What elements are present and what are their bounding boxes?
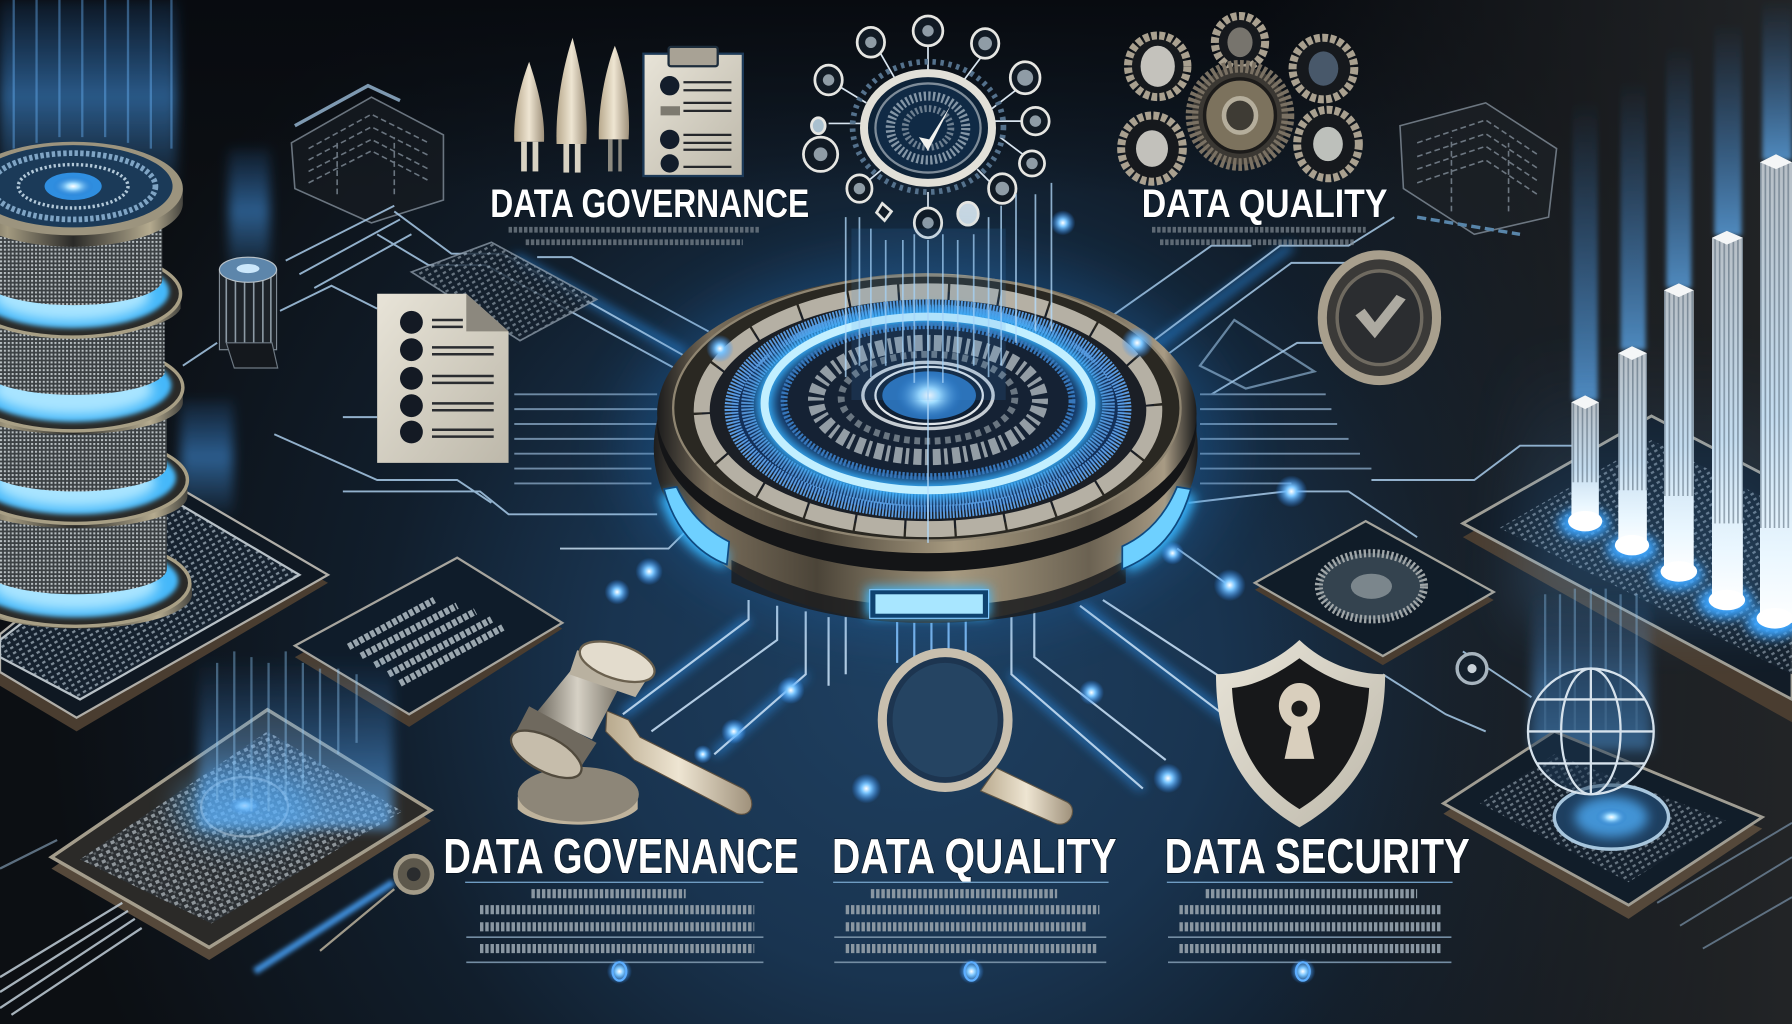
icon: clipboard — [643, 47, 743, 176]
blue tick ring — [731, 306, 1125, 512]
small canister — [219, 257, 278, 368]
globe beam — [1533, 589, 1650, 750]
hub dial — [853, 62, 1003, 192]
bar chart beams — [1573, 0, 1792, 400]
light beams top left — [0, 0, 177, 194]
left light — [664, 487, 729, 565]
bar 2 — [1607, 346, 1657, 563]
icon: shield lock — [1216, 640, 1385, 827]
icon: gavel — [504, 633, 752, 825]
plate 3 — [0, 320, 183, 434]
heading: data security bottom: DATA SECURITY — [1165, 830, 1470, 884]
right panel medallion — [1255, 521, 1494, 665]
garbled caption: data quality — [833, 882, 1109, 962]
upper right panel strokes — [1200, 320, 1314, 389]
faint machinery sketch left — [291, 86, 443, 223]
left small panel — [295, 558, 562, 727]
icon: security node — [1290, 959, 1315, 984]
silver ring — [702, 291, 1154, 529]
disc body — [654, 273, 1198, 623]
gavel handle — [606, 711, 752, 814]
hub connectors — [829, 46, 1024, 211]
gavel base — [518, 767, 639, 825]
bar 1 — [1559, 395, 1609, 538]
database cylinder stack — [0, 142, 192, 629]
circuit lines bottom — [623, 600, 1269, 789]
hub satellites — [803, 16, 1049, 238]
garbled caption: data security — [1167, 882, 1453, 962]
bar 4 — [1698, 231, 1753, 618]
icon: central checkmark hub — [803, 16, 1049, 238]
bottom right tablet — [1443, 731, 1762, 919]
plate 2 — [0, 223, 181, 337]
icon: quality node — [959, 959, 984, 984]
icon: ornate circles — [1121, 16, 1359, 182]
icon: check badge — [1322, 255, 1437, 381]
lower left tablet — [51, 710, 431, 960]
bright ring — [765, 317, 1091, 490]
central disc — [654, 273, 1198, 623]
wire bundle — [0, 840, 142, 1015]
icon: checklist document — [377, 294, 509, 463]
light beam above canister — [229, 149, 270, 274]
garbled caption: data governance top — [509, 230, 760, 242]
garbled caption: data governance — [465, 882, 763, 962]
heading: data quality top: DATA QUALITY — [1142, 182, 1388, 226]
circuit glow — [514, 246, 1291, 789]
top disc — [0, 142, 183, 247]
dark patterned panel upper left — [411, 242, 597, 341]
bar chart platform — [1463, 416, 1792, 722]
light beam beside stack — [181, 400, 233, 514]
data beams into disc — [846, 183, 1051, 543]
circuit lines left — [183, 206, 709, 549]
plate 4 — [0, 411, 187, 528]
left platform — [0, 488, 328, 731]
bar chart glow — [1520, 343, 1792, 617]
glow behind central disc — [625, 257, 1231, 634]
right light — [1122, 487, 1191, 569]
bottom light — [866, 587, 990, 618]
garbled caption: data quality top — [1152, 230, 1366, 242]
icon: globe — [1528, 669, 1654, 794]
gavel head — [504, 633, 659, 788]
icon: magnifier — [882, 653, 1073, 824]
heading: data quality bottom: DATA QUALITY — [832, 830, 1117, 884]
dark data ring — [784, 326, 1072, 477]
glowing nodes — [605, 210, 1307, 803]
circuit lines right — [1114, 217, 1792, 949]
lower left beam — [199, 651, 393, 829]
small round icon — [1457, 654, 1487, 683]
faint machinery sketch right — [1400, 103, 1557, 234]
bar 3 — [1653, 283, 1703, 590]
plate 5 — [0, 505, 192, 629]
bar 5 — [1746, 154, 1792, 638]
icon: governance node — [607, 959, 632, 984]
small round seal with blue streak — [255, 856, 432, 971]
heading: data governance top: DATA GOVERNANCE — [490, 182, 809, 226]
core — [875, 367, 983, 424]
icon: pillars — [514, 38, 629, 173]
hub satellite centers — [814, 25, 1041, 229]
heading: data governance bottom: DATA GOVENANCE — [443, 830, 799, 884]
bar chart — [1559, 154, 1792, 638]
